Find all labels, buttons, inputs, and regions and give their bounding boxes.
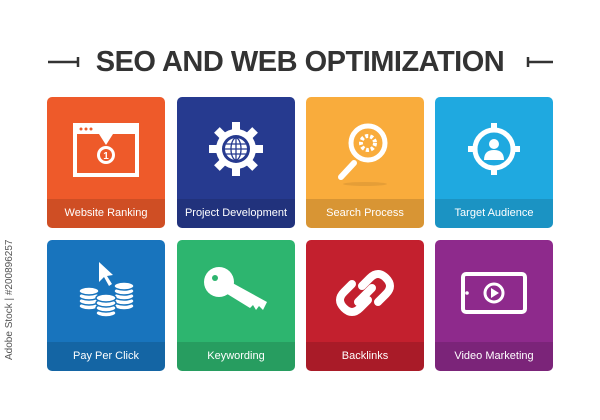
- panel: pay per click: Pay Per Click: [73, 350, 139, 362]
- panel: target audience: Target Audience: [455, 207, 533, 219]
- panel: project development: [177, 97, 295, 228]
- panel: search process: [306, 97, 424, 228]
- panel: keywording: Keywording: [207, 350, 265, 362]
- panel: search process: Search Process: [326, 207, 404, 219]
- panel: project development: Project Development: [185, 207, 287, 219]
- panel: video marketing: [435, 240, 553, 371]
- watermark text: Adobe Stock | #200896257: [4, 240, 15, 360]
- panel: target audience: [435, 97, 553, 228]
- panel: backlinks: [306, 240, 424, 371]
- panel: keywording: [177, 240, 295, 371]
- panel: backlinks: Backlinks: [342, 350, 388, 362]
- panel: pay per click: [47, 240, 165, 371]
- title: SEO AND WEB OPTIMIZATION: [96, 46, 504, 78]
- panel: website ranking: [47, 97, 165, 228]
- panel: website ranking: Website Ranking: [65, 207, 147, 219]
- panel: website ranking: 1: [103, 151, 109, 162]
- panel: video marketing: Video Marketing: [454, 350, 534, 362]
